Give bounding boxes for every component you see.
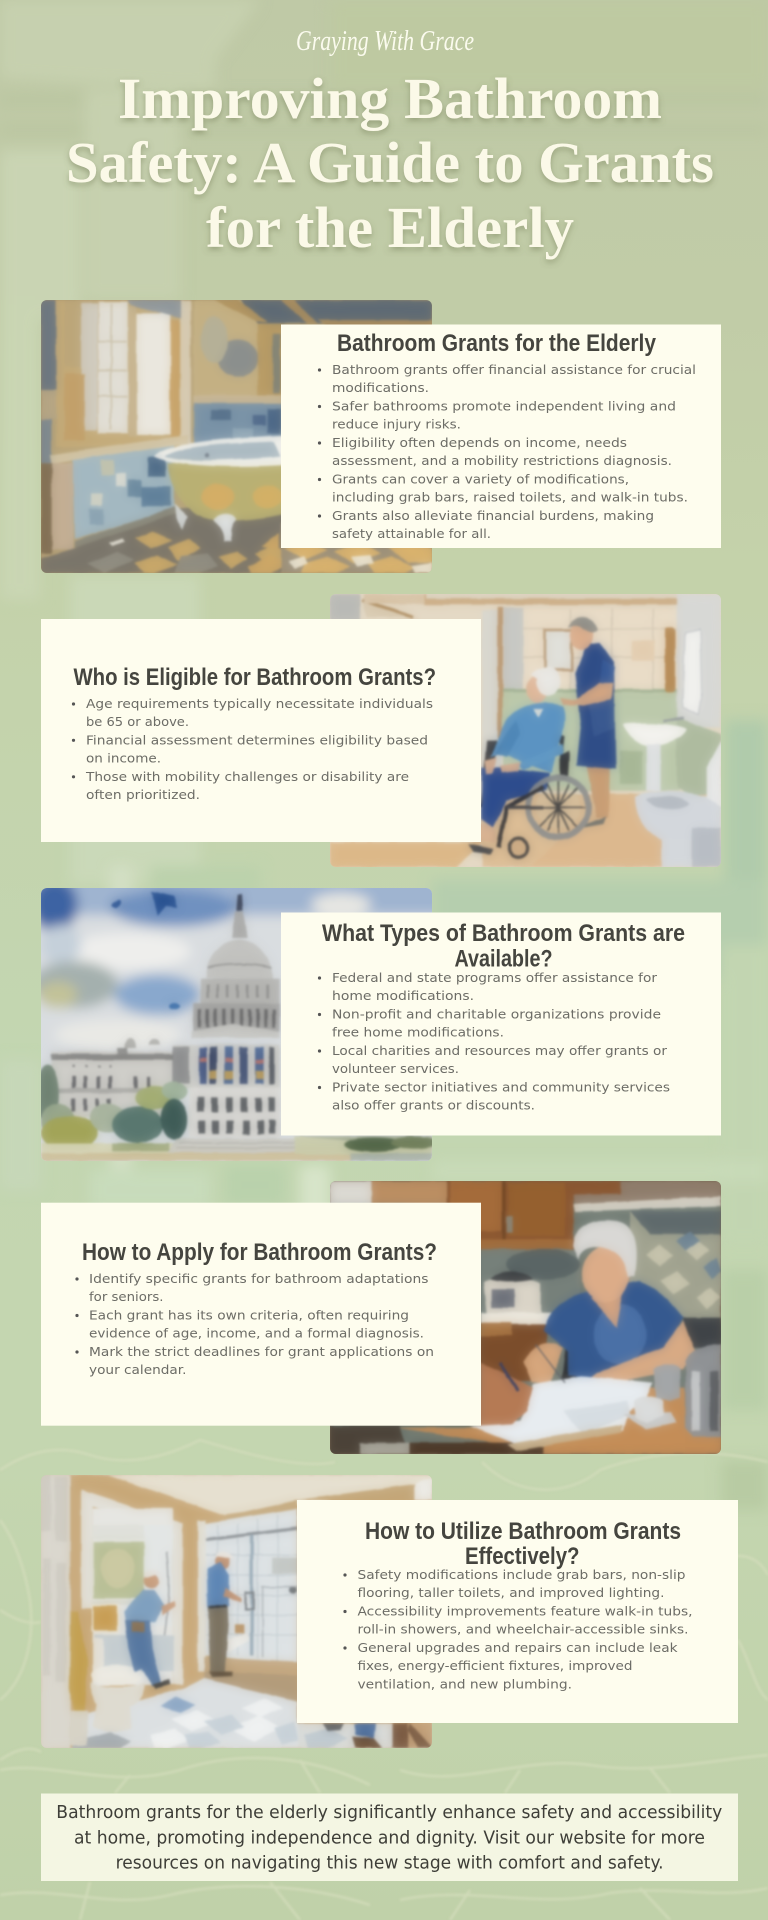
bullet list [72,696,433,802]
bullet list: Identify specific grants for bathroom adaptations [89,1271,428,1286]
bullet list: flooring, taller toilets, and improved lighting. [358,1585,664,1600]
bullet list: Each grant has its own criteria, often requiring [89,1308,409,1322]
illustration: clawfoot bathtub [41,300,432,573]
bullet list: Grants can cover a variety of modifications, [332,472,629,486]
bullet list: Accessibility improvements feature walk-in tubs, [358,1604,692,1618]
bullet list: your calendar. [89,1362,186,1377]
section 2: who is eligible [41,594,721,867]
bullet list: modifications. [332,380,429,395]
bullet list: be 65 or above. [86,714,189,729]
bullet list: Federal and state programs offer assistance for [332,970,658,985]
text panel [41,619,481,842]
heading [365,1518,681,1570]
section 1: bathroom grants for the elderly [41,300,721,573]
section 3: types of grants [41,888,721,1161]
bullet list: General upgrades and repairs can include leak [358,1640,678,1655]
illustration: woman completing paperwork in kitchen [330,1181,721,1454]
bullet list: Financial assessment determines eligibility based [86,732,428,748]
text panel [281,324,721,548]
bullet list: Those with mobility challenges or disability are [85,769,409,784]
closing callout: Bathroom grants for the elderly significantly enhance safety and accessibility [56,1802,723,1823]
text panel [41,1203,481,1426]
heading: Available? [454,946,552,972]
bullet list: Grants also alleviate financial burdens, making [332,508,654,523]
bullet list: Private sector initiatives and community services [332,1080,670,1094]
bullet list [343,1567,692,1692]
bullet list [318,362,696,541]
bullet list [75,1271,434,1377]
bullet list: Non-profit and charitable organizations provide [332,1006,661,1022]
text panel [281,912,721,1136]
bullet list: home modifications. [332,988,474,1003]
closing callout: resources on navigating this new stage with comfort and safety. [116,1853,664,1874]
bullet list: reduce injury risks. [332,417,461,432]
heading: How to Utilize Bathroom Grants [365,1518,681,1545]
closing callout [41,1794,738,1881]
illustration: caregiver and woman in wheelchair [330,594,721,867]
bullet list: evidence of age, income, and a formal diagnosis. [89,1326,424,1341]
illustration: workers installing walk-in shower [41,1475,432,1748]
title [66,66,714,260]
title: Safety: A Guide to Grants [66,130,714,195]
bullet list: Safety modifications include grab bars, non-slip [358,1567,686,1582]
bullet list: Bathroom grants offer financial assistance for crucial [332,362,696,377]
section 5: how to utilize [41,1475,738,1748]
bullet list: including grab bars, raised toilets, and walk-in tubs. [332,490,688,505]
bullet list: on income. [86,751,161,766]
bullet list: ventilation, and new plumbing. [358,1676,572,1692]
title: for the Elderly [206,195,574,260]
bullet list: fixes, energy-efficient fixtures, improved [358,1658,632,1673]
heading: What Types of Bathroom Grants are [322,920,685,947]
bullet list: free home modifications. [332,1025,504,1040]
heading: Bathroom Grants for the Elderly [337,330,657,357]
bullet list: volunteer services. [332,1061,459,1076]
bullet list [318,970,670,1113]
bullet list: Mark the strict deadlines for grant applications on [89,1344,434,1359]
section 4: how to apply [41,1181,721,1454]
bullet list: Eligibility often depends on income, needs [332,435,627,450]
bullet list: Age requirements typically necessitate individuals [86,696,433,711]
bullet list: often prioritized. [86,787,200,802]
illustration: capitol building [41,888,432,1161]
bullet list: Safer bathrooms promote independent living and [332,398,676,414]
bullet list: also offer grants or discounts. [332,1098,535,1113]
heading [322,920,685,972]
bullet list: Local charities and resources may offer grants or [332,1043,668,1058]
text panel [297,1500,738,1723]
closing callout: at home, promoting independence and dignity. Visit our website for more [74,1828,705,1848]
brand name: Graying With Grace [296,25,474,57]
bullet list: for seniors. [89,1289,164,1304]
heading: Who is Eligible for Bathroom Grants? [74,664,436,691]
bullet list: assessment, and a mobility restrictions diagnosis. [332,453,672,468]
heading: Effectively? [465,1543,580,1570]
bullet list: safety attainable for all. [332,526,491,541]
title: Improving Bathroom [118,66,662,131]
heading: How to Apply for Bathroom Grants? [82,1239,437,1266]
bullet list: roll-in showers, and wheelchair-accessible sinks. [358,1622,688,1637]
